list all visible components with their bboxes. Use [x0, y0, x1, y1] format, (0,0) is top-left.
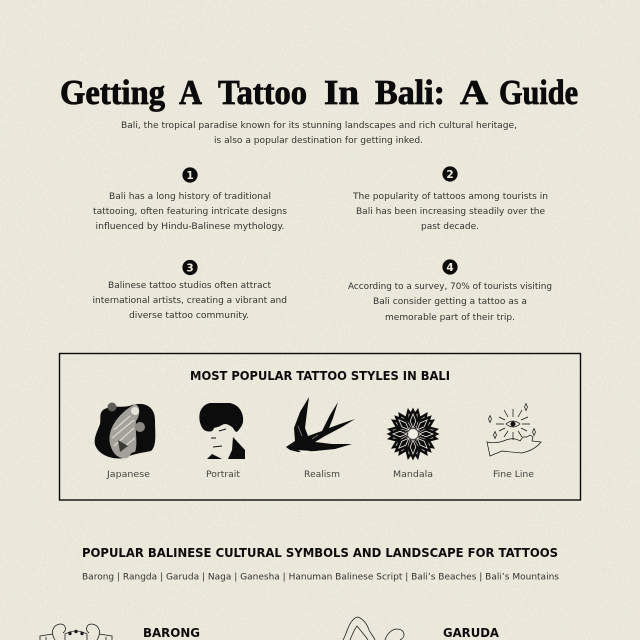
number badge 1: [182, 167, 198, 183]
fact 4 text: According to a survey, 70% of tourists visiting: [348, 282, 552, 292]
fact 2: [352, 166, 548, 232]
fact 1 text: [93, 192, 287, 232]
number badge 4: [442, 259, 458, 275]
number badge 1: 1: [186, 170, 194, 182]
heading: Garuda: GARUDA: [443, 626, 500, 640]
fact 1 text: influenced by Hindu-Balinese mythology.: [96, 222, 284, 232]
fact 4 text: [348, 282, 552, 323]
icon: mandala: [386, 407, 440, 461]
intro text: Bali, the tropical paradise known for its stunning landscapes and rich cultural heritage,: [121, 121, 517, 131]
fact 4: [348, 259, 552, 323]
fact 1 text: Bali has a long history of traditional: [109, 192, 271, 202]
intro text: [121, 121, 517, 146]
heading: Barong: BARONG: [143, 626, 200, 640]
icon: fine line hand and eye: [487, 404, 541, 456]
icon: Japanese koi: [95, 402, 155, 458]
fact 2 text: past decade.: [421, 222, 479, 232]
number badge 3: 3: [186, 262, 194, 274]
title: A: [460, 73, 489, 112]
section heading: cultural symbols: POPULAR BALINESE CULTURAL SYMBOLS AND LANDSCAPE FOR TATTOOS: [82, 546, 558, 560]
fact 3 text: international artists, creating a vibrant and: [92, 296, 287, 306]
fact 3 text: [92, 281, 287, 321]
label: Portrait: Portrait: [206, 470, 240, 480]
title: Tattoo: [218, 73, 307, 112]
intro text: is also a popular destination for getting inked.: [214, 136, 423, 146]
icon: swallow: [286, 397, 355, 453]
fact 4 text: Bali consider getting a tattoo as a: [373, 297, 527, 307]
number badge 2: 2: [446, 169, 454, 181]
label: Japanese: Japanese: [106, 470, 150, 480]
number badge 3: [182, 260, 198, 275]
label: Fine Line: Fine Line: [493, 470, 534, 480]
fact 2 text: Bali has been increasing steadily over the: [356, 207, 545, 217]
fact 4 text: memorable part of their trip.: [385, 313, 515, 323]
title: [60, 73, 578, 112]
fact 2 text: The popularity of tattoos among tourists in: [352, 192, 548, 202]
fact 3: [92, 260, 287, 321]
title: Getting: [60, 73, 165, 112]
fact 1: [93, 167, 287, 232]
title: A: [179, 73, 203, 112]
title: Bali:: [375, 73, 445, 112]
fact 2 text: [352, 192, 548, 232]
label: Mandala: Mandala: [393, 470, 433, 480]
icon: portrait: [199, 403, 245, 459]
title: Guide: [499, 73, 578, 112]
fact 1 text: tattooing, often featuring intricate designs: [93, 207, 287, 217]
number badge 4: 4: [446, 262, 454, 274]
number badge 2: [442, 166, 458, 182]
label: Realism: Realism: [304, 470, 340, 480]
icon: barong: [40, 624, 112, 640]
title: In: [324, 73, 359, 112]
panel heading: MOST POPULAR TATTOO STYLES IN BALI: [190, 369, 450, 383]
symbols list: Barong | Rangda | Garuda | Naga | Ganesha | Hanuman Balinese Script | Bali’s Beaches | Bali’s Mountains: [82, 572, 559, 582]
icon: garuda: [343, 617, 404, 640]
panel: tattoo styles: [60, 354, 580, 500]
panel border: [60, 354, 580, 500]
fact 3 text: Balinese tattoo studios often attract: [108, 281, 271, 291]
fact 3 text: diverse tattoo community.: [129, 311, 249, 321]
